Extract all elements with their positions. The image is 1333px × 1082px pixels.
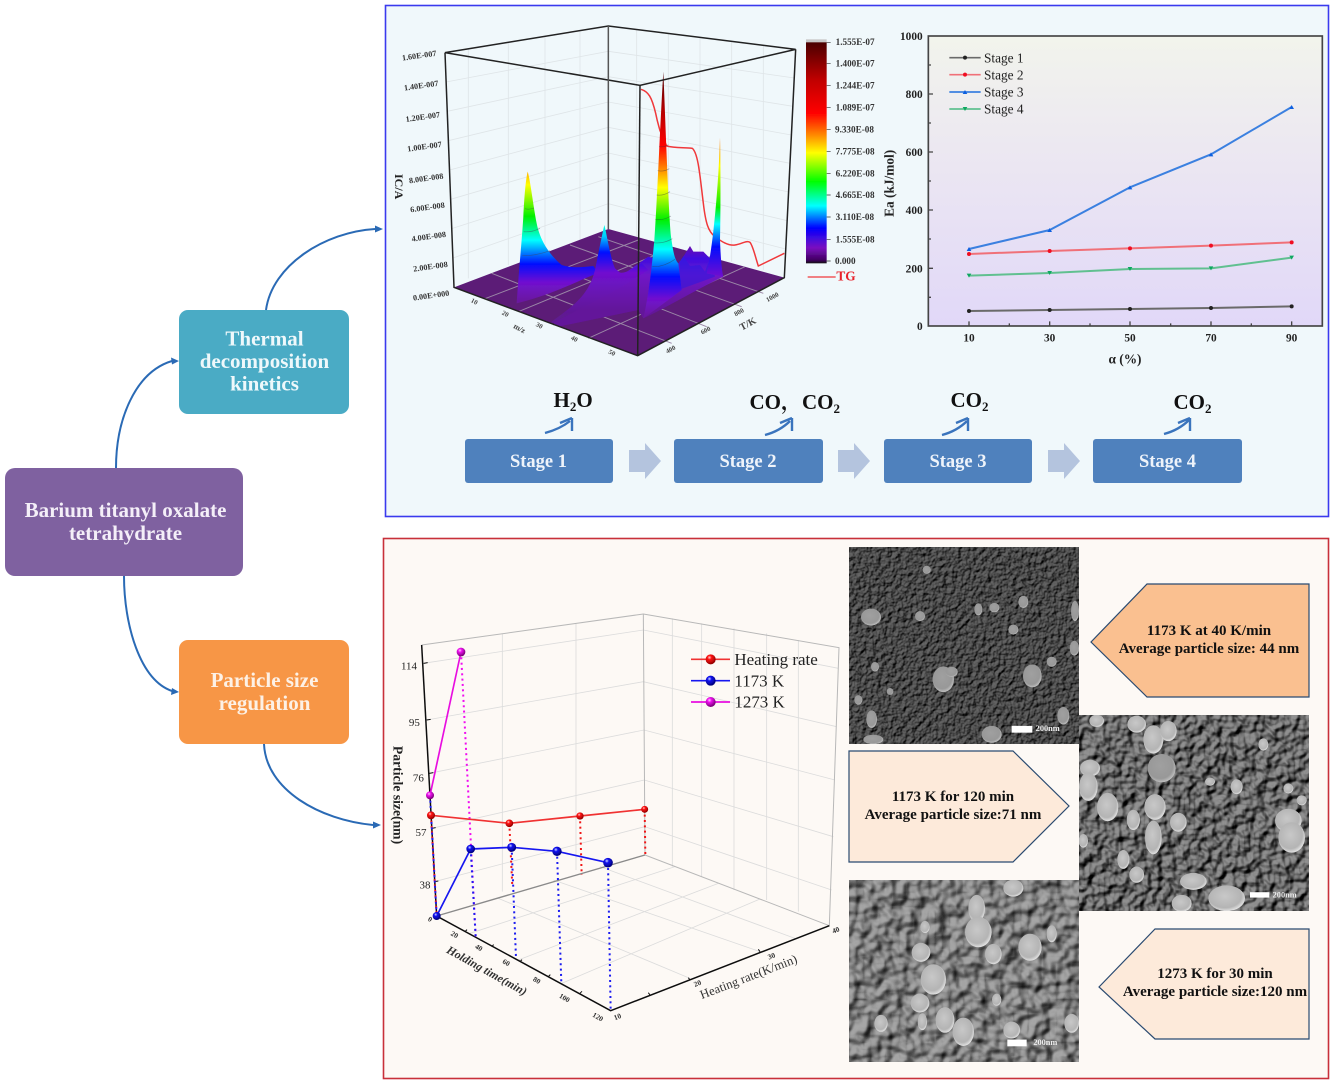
holding time axis [426,914,605,1024]
colour scale bar: 6.220E-08 [836,168,875,178]
arrow: oxalate to thermal decomposition [116,358,179,468]
box: Particle size regulation: Particle size [211,668,318,692]
z axis labels: 6.00E-008 [410,201,445,214]
y axis labels: 400 [906,205,923,217]
label: CO2 release stage 4: 2 [1205,401,1212,416]
SEM image: 1173 K for 120 min [1079,715,1309,912]
box: Thermal decomposition kinetics: kinetics [230,372,299,396]
box: Stage 3: Stage 3 [929,452,987,472]
box: Stage 4: Stage 4 [1139,452,1196,472]
series: 1173 K [433,843,613,920]
box: Thermal decomposition kinetics: decomposition [200,349,330,373]
y axis labels: 0 [917,321,923,333]
colour scale bar: 9.330E-08 [835,124,874,134]
y axis labels: 200 [906,263,923,275]
legend [691,650,818,712]
heating rate axis: 40 [831,924,841,936]
colour scale bar: 1.400E-07 [836,59,875,69]
callout: 1173 K at 40 K/min [1091,584,1309,697]
holding time axis: 120 [591,1010,605,1024]
callout: 1173 K at 40 K/min: 1173 K at 40 K/min [1147,623,1272,639]
floor axis labels: 10 [469,297,479,307]
heating rate axis: 20 [692,978,703,989]
label: CO2 release stage 4: CO [1174,390,1205,414]
heating rate axis: Heating rate(K/min) [698,952,799,1002]
heating rate axis: 10 [612,1011,623,1022]
label: CO2 release stage 3 [942,388,988,435]
z axis labels: 1.60E-007 [401,49,437,63]
holding time axis: 80 [531,974,543,986]
x axis title: α (%) [1109,351,1141,366]
holding time axis: Holding time(min) [443,943,529,998]
callout: 1273 K for 30 min: Average particle size:120 nm [1123,984,1308,1000]
callout: 1173 K for 120 min [849,751,1069,862]
z axis labels [401,49,450,303]
legend: Stage 1 [984,50,1024,65]
label: CO2 release stage 3: CO [950,388,982,412]
floor axis labels: 50 [607,349,617,358]
colour scale bar: 1.089E-07 [836,103,875,113]
chart: 3D ion current and TG surface [392,26,875,358]
label: H2O release: O [576,388,593,412]
box: Barium titanyl oxalate tetrahydrate: Barium titanyl oxalate [25,498,226,522]
particle size tick labels [401,660,431,892]
surface: peak 4 [707,138,723,277]
box: Barium titanyl oxalate tetrahydrate [5,468,243,576]
box: Stage 2 [674,439,823,483]
arrow: stage 1 to 2 [629,443,661,479]
label: CO, CO2 release: CO [802,390,834,414]
chart: 3D particle size plot [389,614,841,1024]
surface: low ridges [552,246,723,327]
callout: 1173 K at 40 K/min: Average particle size: 44 nm [1119,641,1300,657]
floor axis labels: T/K [738,315,759,333]
floor axis labels: 400 [665,344,678,355]
colour scale bar [806,37,875,266]
x axis labels: 50 [1124,332,1136,344]
label: CO, CO2 release [750,390,840,435]
surface: peak 2 [552,225,648,323]
SEM image: 1173 K at 40 K/min: 200nm [1036,724,1060,733]
y axis title: Particle size(nm) [389,746,405,844]
holding time axis: 20 [449,929,460,940]
line: Stage 1 [967,304,1294,313]
SEM image: 1173 K for 120 min: 200nm [1273,891,1297,900]
arrow: stage 2 to 3 [838,443,870,479]
series: 1273 K [426,648,465,799]
box: Stage 1 [465,439,613,483]
particle size tick labels: 76 [413,772,424,784]
holding time axis: 0 [426,914,434,924]
holding time axis: 100 [558,991,572,1005]
arrow: oxalate to particle size [124,576,179,695]
line: Stage 4 [967,256,1294,278]
box: Stage 1: Stage 1 [510,452,567,472]
floor of 3D plot [454,229,784,356]
legend [949,50,1024,117]
z axis labels: 1.20E-007 [405,110,441,124]
box: Stage 4 [1093,439,1242,483]
process flow: four stages [465,388,1242,483]
colour scale bar: 1.555E-07 [836,37,875,47]
heating rate axis: 30 [766,950,777,962]
arrow: thermal decomposition to panel [266,226,383,310]
y axis labels: 800 [906,89,923,101]
box: Particle size regulation: regulation [219,691,311,715]
z axis labels: 0.00E+000 [412,289,450,303]
y axis labels: 1000 [900,31,923,43]
legend: 1173 K [734,671,785,690]
z axis title: IC/A [392,174,406,200]
legend: TG: TG [836,269,856,284]
label: CO, CO2 release: 2 [834,401,840,416]
box: Stage 2: Stage 2 [719,452,777,472]
SEM image: 1273 K for 30 min [849,880,1079,1062]
arrow: stage 3 to 4 [1048,443,1080,479]
y axis title: Ea (kJ/mol) [882,150,897,217]
particle size tick labels: 95 [409,717,420,729]
curve: TG red line [641,89,784,266]
colour scale bar: 7.775E-08 [836,146,875,156]
chart: activation energy line chart [882,31,1322,366]
box: Thermal decomposition kinetics [179,310,349,414]
z axis labels: 1.40E-007 [403,79,439,93]
floor axis labels: 40 [569,335,579,344]
arrow: particle size to panel [264,744,381,828]
box: Thermal decomposition kinetics: Thermal [225,326,304,350]
drop lines [430,652,645,1011]
line: Stage 3 [967,105,1294,251]
y axis labels [900,31,923,333]
surface: peak 1 [517,172,598,303]
floor axis labels [469,291,781,358]
label: CO, CO2 release: CO， [750,390,802,414]
colour scale bar: 0.000 [835,256,856,266]
holding time axis: 40 [473,942,485,953]
series: Heating rate [427,806,648,827]
z axis labels: 2.00E-008 [413,260,448,274]
x axis labels: 90 [1286,332,1298,344]
callout: 1273 K for 30 min [1099,929,1309,1039]
z axis labels: 8.00E-008 [408,172,444,185]
x axis labels: 70 [1205,332,1217,344]
plot frame [445,26,796,356]
particle size tick labels: 57 [416,827,427,839]
label: H2O release: 2 [570,399,576,414]
x axis labels [963,332,1298,344]
heating rate axis [612,924,841,1022]
callout: 1173 K for 120 min: 1173 K for 120 min [892,789,1015,805]
legend: 1273 K [734,693,786,712]
colour scale bar: 4.665E-08 [836,190,875,200]
x axis labels: 30 [1044,332,1056,344]
floor axis labels: 600 [700,325,713,336]
box: Stage 3 [884,439,1032,483]
line: Stage 2 [967,240,1294,256]
x axis labels: 10 [963,332,975,344]
panel: thermal decomposition background [386,6,1328,516]
SEM image: 1173 K at 40 K/min [849,547,1079,744]
holding time axis: 60 [501,957,512,968]
floor axis labels: 20 [500,310,510,319]
floor axis labels: 800 [733,307,746,318]
colour scale bar: 1.244E-07 [836,81,875,91]
y axis labels: 600 [906,147,923,159]
particle size tick labels: 38 [420,880,431,892]
label: H2O release: H [554,388,570,412]
callout: 1173 K for 120 min: Average particle size:71 nm [865,807,1042,823]
floor axis labels: 1000 [765,291,781,304]
legend: TG [808,269,856,284]
z axis labels: 4.00E-008 [411,230,447,244]
z axis labels: 1.00E-007 [407,140,442,154]
colour scale bar: 1.555E-08 [836,234,875,244]
floor axis labels: m/z [512,322,527,336]
panel: particle size background [384,538,1328,1078]
particle size tick labels: 114 [401,660,418,672]
callout: 1273 K for 30 min: 1273 K for 30 min [1157,966,1273,982]
legend: Stage 2 [984,67,1024,82]
legend: Stage 3 [984,85,1024,100]
box: Barium titanyl oxalate tetrahydrate: tetrahydrate [69,521,182,545]
surface: peak 3 [643,72,682,318]
legend: Heating rate [734,650,818,669]
label: CO2 release stage 3: 2 [982,399,988,414]
label: CO2 release stage 4 [1164,390,1212,434]
colour scale bar: 3.110E-08 [836,212,874,222]
box: Particle size regulation [179,640,349,744]
floor axis labels: 30 [534,321,544,331]
label: H2O release [545,388,593,433]
axes [422,645,829,1011]
SEM image: 1273 K for 30 min: 200nm [1033,1038,1057,1047]
legend: Stage 4 [984,102,1024,117]
